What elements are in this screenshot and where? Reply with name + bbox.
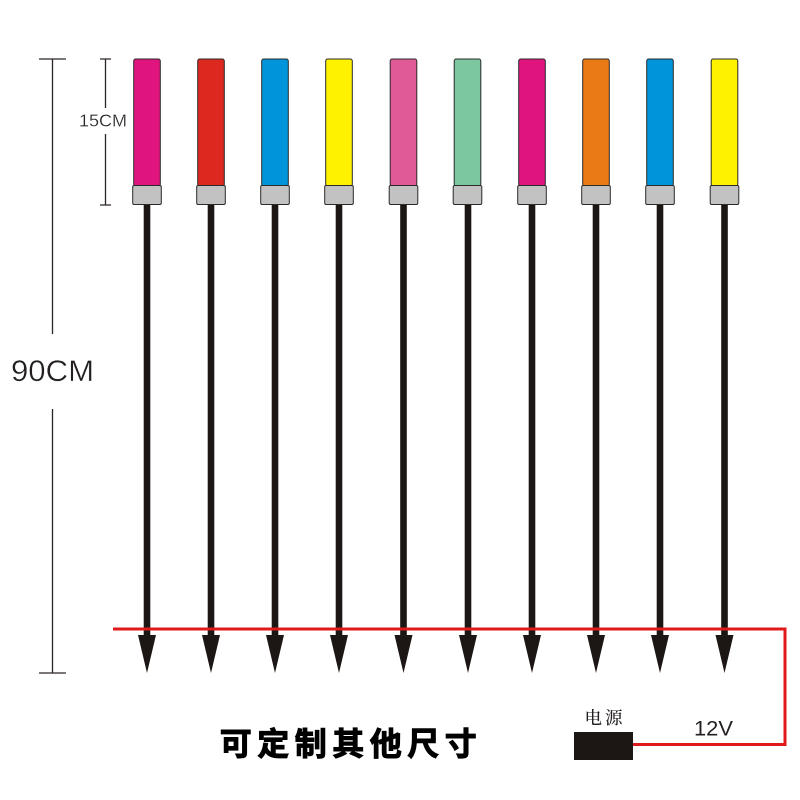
stake 7: magenta (518, 59, 546, 673)
dimension: 15CM (79, 59, 127, 205)
stake 8: orange (582, 59, 610, 673)
stake 3: blue (261, 59, 289, 673)
label: power: 电源 (584, 705, 626, 730)
stake 9: blue (646, 59, 674, 673)
label: 12V: 12V (694, 718, 733, 740)
stake 6: green (453, 59, 482, 673)
stake 4: yellow (325, 59, 353, 673)
stake 5: pink (389, 59, 418, 673)
label: 15CM: 15CM (79, 110, 127, 130)
caption: other sizes can be customized: 可定制其他尺寸 (220, 726, 482, 762)
power supply box (574, 732, 633, 760)
red wire (113, 629, 785, 744)
stake 2: red (197, 59, 225, 673)
stake 10: yellow (710, 59, 739, 673)
label: 90CM: 90CM (11, 355, 94, 388)
stake 1: magenta (133, 59, 161, 673)
dimension: 90CM (11, 59, 94, 673)
